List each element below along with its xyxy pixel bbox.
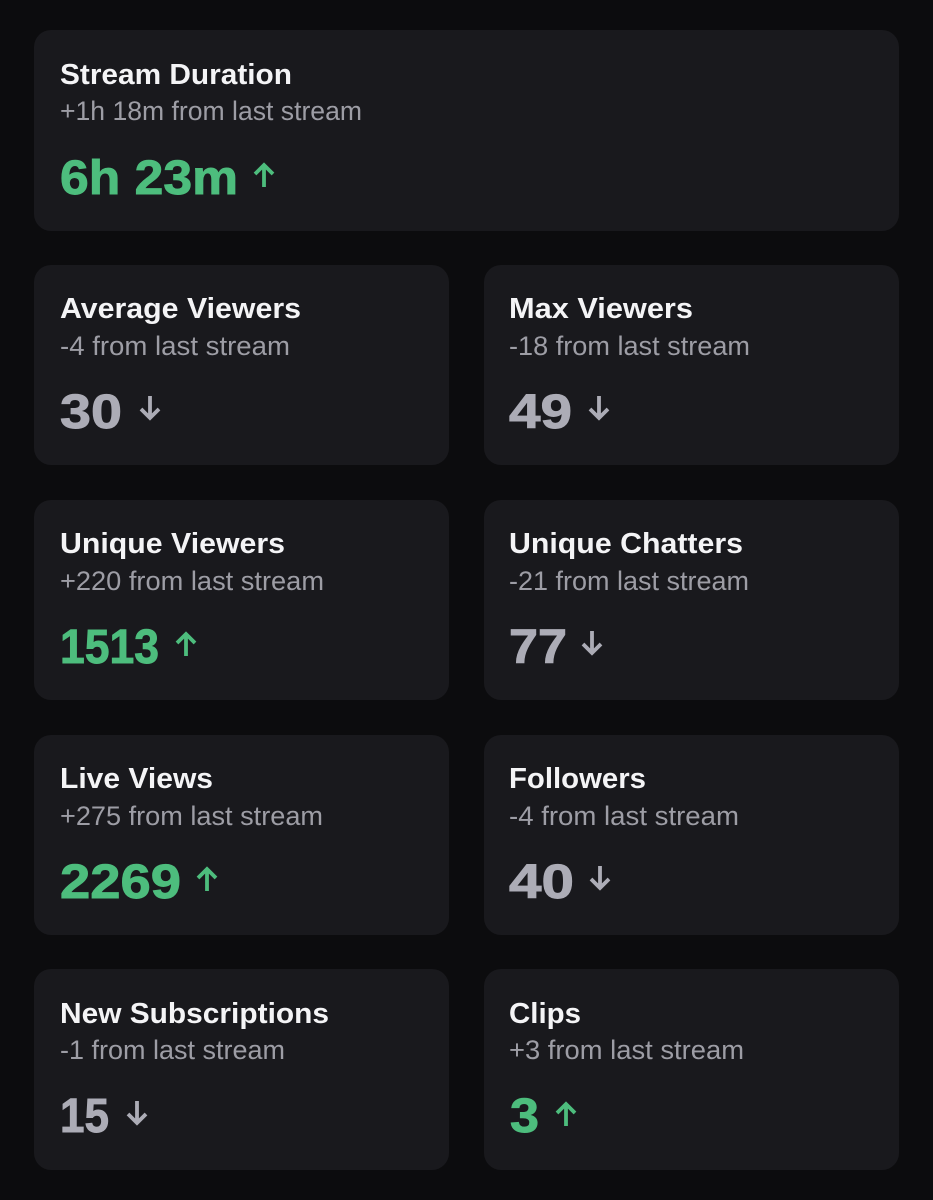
value: new subscriptions: 15 <box>60 1090 109 1143</box>
subtitle: new subscriptions change: -1 from last stream <box>60 1035 285 1065</box>
value: stream duration: 6h 23m <box>60 152 238 205</box>
card: new subscriptions <box>34 969 449 1170</box>
subtitle: unique viewers change: +220 from last stream <box>60 566 324 596</box>
icon: down arrow <box>583 631 601 653</box>
card: average viewers <box>34 265 449 465</box>
title: max viewers: Max Viewers <box>509 293 693 325</box>
card: unique viewers <box>34 500 449 700</box>
icon: down arrow <box>590 396 608 418</box>
value: clips: 3 <box>510 1090 539 1143</box>
icon: up arrow <box>177 634 195 656</box>
card: live views <box>34 735 449 935</box>
card: stream duration <box>34 30 899 231</box>
value: average viewers: 30 <box>60 386 122 439</box>
icon: up arrow <box>557 1104 575 1126</box>
value: followers: 40 <box>509 856 574 909</box>
icon: down arrow <box>128 1101 146 1123</box>
subtitle: unique chatters change: -21 from last stream <box>509 566 749 596</box>
card: followers <box>484 735 899 935</box>
card: clips <box>484 969 899 1170</box>
title: clips: Clips <box>509 998 581 1030</box>
title: new subscriptions: New Subscriptions <box>60 998 329 1030</box>
icon: down arrow <box>591 866 609 888</box>
icon: up arrow <box>198 869 216 891</box>
title: followers: Followers <box>509 763 646 795</box>
subtitle: average viewers change: -4 from last stream <box>60 331 290 361</box>
subtitle: clips change: +3 from last stream <box>509 1035 744 1065</box>
title: stream duration: Stream Duration <box>60 59 292 91</box>
title: unique viewers: Unique Viewers <box>60 528 285 560</box>
icon: down arrow <box>141 396 159 418</box>
card: max viewers <box>484 265 899 465</box>
title: average viewers: Average Viewers <box>60 293 301 325</box>
title: unique chatters: Unique Chatters <box>509 528 743 560</box>
value: live views: 2269 <box>60 856 181 909</box>
subtitle: stream duration change: +1h 18m from last stream <box>60 96 362 126</box>
subtitle: live views change: +275 from last stream <box>60 801 323 831</box>
value: unique chatters: 77 <box>509 621 567 674</box>
icon: up arrow <box>255 165 273 187</box>
value: max viewers: 49 <box>509 386 572 439</box>
subtitle: max viewers change: -18 from last stream <box>509 331 750 361</box>
value: unique viewers: 1513 <box>60 621 159 674</box>
subtitle: followers change: -4 from last stream <box>509 801 739 831</box>
card: unique chatters <box>484 500 899 700</box>
title: live views: Live Views <box>60 763 213 795</box>
